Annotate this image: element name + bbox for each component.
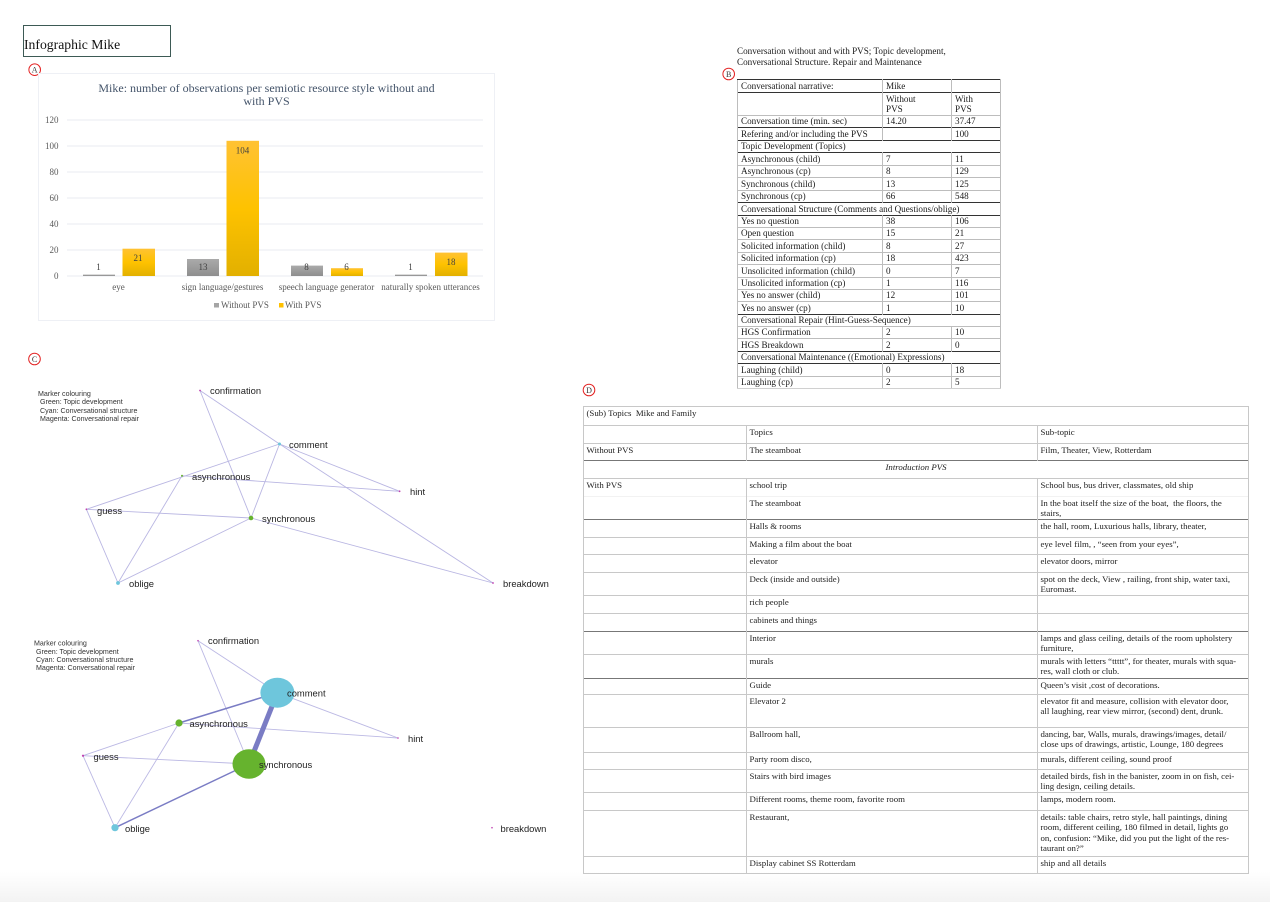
y axis labels: 80 xyxy=(50,167,59,177)
table B: conversational narrative counts: 38 xyxy=(886,216,895,226)
table B: conversational narrative counts: Yes no question xyxy=(741,216,799,226)
table D: sub topics Mike and family: School bus, bus driver, classmates, old ship xyxy=(1040,480,1193,490)
table D: sub topics Mike and family: room, different ceiling, 180 filmed in detail, lights go xyxy=(1040,822,1228,832)
node labels: confirmation xyxy=(208,635,259,646)
title xyxy=(24,26,170,56)
table B: conversational narrative counts: 66 xyxy=(886,191,895,201)
table B: conversational narrative counts: Synchronous (cp) xyxy=(741,191,806,201)
table B: conversational narrative counts: Asynchronous (child) xyxy=(741,154,820,164)
table D: sub topics Mike and family: elevator doors, mirror xyxy=(1040,556,1117,566)
badge A: A xyxy=(32,66,38,75)
table D: sub topics Mike and family: details: table chairs, retro style, hall paintings, dining xyxy=(1040,812,1227,822)
node labels xyxy=(94,635,546,834)
table B: conversational narrative counts: Conversational Maintenance ((Emotional) Expressions) xyxy=(741,352,944,362)
table B: conversational narrative counts: HGS Confirmation xyxy=(741,327,811,337)
table B: conversational narrative counts: 8 xyxy=(886,166,891,176)
table B: conversational narrative counts: 116 xyxy=(955,278,968,288)
table B: conversational narrative counts: Refering and/or including the PVS xyxy=(741,129,868,139)
y axis labels: 40 xyxy=(50,219,59,229)
y axis labels: 20 xyxy=(50,245,59,255)
node labels: comment xyxy=(287,688,326,698)
legend xyxy=(214,300,321,310)
table B: conversational narrative counts: 18 xyxy=(886,253,895,263)
table B: conversational narrative counts: 1 xyxy=(886,303,891,313)
value labels: 104 xyxy=(236,146,250,156)
table D: sub topics Mike and family: Without PVS xyxy=(586,445,633,455)
y axis labels: 60 xyxy=(50,193,59,203)
bars: with PVS xyxy=(122,141,468,276)
table D: sub topics Mike and family: lamps, modern room. xyxy=(1040,794,1116,804)
table B: conversational narrative counts: 0 xyxy=(955,340,960,350)
table D: sub topics Mike and family: Party room disco, xyxy=(750,754,812,764)
table D: sub topics Mike and family: Restaurant, xyxy=(750,812,789,822)
marker colouring legend: Magenta: Conversational repair xyxy=(36,664,136,672)
table D: sub topics Mike and family: Guide xyxy=(750,680,771,690)
table D: sub topics Mike and family: stairs, xyxy=(1040,508,1061,518)
table D: sub topics Mike and family: With PVS xyxy=(586,480,622,490)
category labels: eye xyxy=(112,282,125,292)
table D: sub topics Mike and family: Stairs with bird images xyxy=(750,771,831,781)
table B: conversational narrative counts: With xyxy=(955,94,973,104)
bars: without PVS xyxy=(83,259,427,276)
table B: conversational narrative counts: Conversational narrative: xyxy=(741,81,833,91)
table B: conversational narrative counts: Asynchronous (cp) xyxy=(741,166,811,176)
marker colouring legend: Cyan: Conversational structure xyxy=(40,407,137,415)
value labels: 6 xyxy=(344,262,349,272)
table B: conversational narrative counts: 10 xyxy=(955,327,964,337)
table B heading: Conversation without and with PVS; Topic development, xyxy=(737,46,946,56)
value labels: 1 xyxy=(408,262,413,272)
network chart: with PVS xyxy=(34,635,546,834)
badge B: B xyxy=(726,70,731,79)
table B: conversational narrative counts: 0 xyxy=(886,365,891,375)
table D: sub topics Mike and family: Making a film about the boat xyxy=(750,539,852,549)
y axis labels: 100 xyxy=(45,141,59,151)
table B: conversational narrative counts: 106 xyxy=(955,216,969,226)
table B heading xyxy=(737,46,946,67)
table B: conversational narrative counts: 548 xyxy=(955,191,969,201)
table D: sub topics Mike and family: eye level film, , “seen from your eyes”, xyxy=(1040,539,1179,549)
table D: sub topics Mike and family: Euromast. xyxy=(1040,584,1076,594)
chart title: Mike: number of observations per semiotic resource style without and xyxy=(98,81,435,95)
table B: conversational narrative counts: Yes no answer (cp) xyxy=(741,303,811,313)
table B: conversational narrative counts: 2 xyxy=(886,327,891,337)
badge C xyxy=(29,353,40,365)
table D: sub topics Mike and family: elevator fit and measure, collision with elevator door, xyxy=(1040,696,1228,706)
table B: conversational narrative counts: Conversation time (min. sec) xyxy=(741,116,847,126)
marker colouring legend: Green: Topic development xyxy=(36,648,119,656)
node labels: synchronous xyxy=(259,759,312,770)
table D: sub topics Mike and family: Film, Theater, View, Rotterdam xyxy=(1040,445,1152,455)
table B: conversational narrative counts: PVS xyxy=(955,104,972,114)
marker colouring legend: Green: Topic development xyxy=(40,398,123,406)
table D: sub topics Mike and family: all laughing, rear view mirror, (second) dent, drunk. xyxy=(1040,706,1223,716)
table B: conversational narrative counts: 27 xyxy=(955,241,964,251)
table B: conversational narrative counts: Without xyxy=(886,94,916,104)
table B: conversational narrative counts: 1 xyxy=(886,278,891,288)
table D: sub topics Mike and family: cabinets and things xyxy=(750,615,817,625)
table D: sub topics Mike and family: detailed birds, fish in the banister, zoom in on fish, cei- xyxy=(1040,771,1234,781)
table D: sub topics Mike and family: Halls & rooms xyxy=(750,521,801,531)
value labels: 18 xyxy=(446,257,456,267)
node labels: confirmation xyxy=(210,385,261,396)
table D: sub topics Mike and family: The steamboat xyxy=(750,445,801,455)
node labels: breakdown xyxy=(503,578,549,589)
badge B xyxy=(723,68,734,80)
table D: sub topics Mike and family: Ballroom hall, xyxy=(750,729,800,739)
table D: sub topics Mike and family: dancing, bar, Walls, murals, drawings/images, detail/ xyxy=(1040,729,1226,739)
legend: With PVS xyxy=(285,300,321,310)
table D: sub topics Mike and family: furniture, xyxy=(1040,643,1073,653)
table D: sub topics Mike and family: school trip xyxy=(750,480,787,490)
table D: sub topics Mike and family: close ups of drawings, artistic, Lounge, 180 degrees xyxy=(1040,739,1223,749)
node labels: guess xyxy=(97,505,122,516)
table B: conversational narrative counts: 11 xyxy=(955,154,964,164)
table B: conversational narrative counts: Unsolicited information (cp) xyxy=(741,278,845,288)
node labels: hint xyxy=(408,733,424,744)
value labels: 13 xyxy=(198,262,208,272)
table B: conversational narrative counts: 2 xyxy=(886,340,891,350)
node labels: hint xyxy=(410,486,426,497)
node labels: asynchronous xyxy=(192,471,251,482)
panel: bar chart of semiotic resource styles xyxy=(38,74,494,320)
badge A xyxy=(29,64,40,76)
badge D xyxy=(583,384,595,396)
table B: conversational narrative counts: 0 xyxy=(886,266,891,276)
table D: sub topics Mike and family: murals, different ceiling, sound proof xyxy=(1040,754,1172,764)
marker colouring legend: Cyan: Conversational structure xyxy=(36,656,133,664)
table D: sub topics Mike and family: murals with letters “ttttt”, for theater, murals with squa- xyxy=(1040,656,1236,666)
table B: conversational narrative counts: Yes no answer (child) xyxy=(741,290,820,300)
legend: Without PVS xyxy=(221,300,269,310)
table B heading: Conversational Structure. Repair and Maintenance xyxy=(737,57,922,67)
table D: sub topics Mike and family: In the boat itself the size of the boat, the floors, the xyxy=(1040,498,1222,508)
table D: sub topics Mike and family: taurant on?” xyxy=(1040,843,1084,853)
table D: sub topics Mike and family: (Sub) Topics Mike and Family xyxy=(586,408,696,418)
table B: conversational narrative counts: 21 xyxy=(955,228,964,238)
table B: conversational narrative counts: Solicited information (cp) xyxy=(741,253,836,263)
y axis labels: 120 xyxy=(45,115,59,125)
table B: conversational narrative counts: HGS Breakdown xyxy=(741,340,804,350)
table B: conversational narrative counts: Open question xyxy=(741,228,794,238)
y axis labels: 0 xyxy=(54,271,59,281)
table D: sub topics Mike and family xyxy=(583,406,1249,874)
marker colouring legend: Marker colouring xyxy=(38,390,91,398)
table B: conversational narrative counts: 15 xyxy=(886,228,895,238)
table B: conversational narrative counts: Topic Development (Topics) xyxy=(741,141,846,151)
table D: sub topics Mike and family: ling design, ceiling details. xyxy=(1040,781,1135,791)
table B: conversational narrative counts: 7 xyxy=(955,266,960,276)
table D: sub topics Mike and family: elevator xyxy=(750,556,778,566)
category labels: speech language generator xyxy=(279,282,374,292)
table B: conversational narrative counts: 129 xyxy=(955,166,969,176)
chart title: with PVS xyxy=(243,94,290,108)
table B: conversational narrative counts: 100 xyxy=(955,129,969,139)
table D: sub topics Mike and family: murals xyxy=(750,656,773,666)
value labels: 8 xyxy=(304,262,309,272)
table B: conversational narrative counts: Mike xyxy=(886,81,905,91)
category labels: naturally spoken utterances xyxy=(381,282,480,292)
table D: sub topics Mike and family: Deck (inside and outside) xyxy=(750,574,840,584)
table D: sub topics Mike and family: lamps and glass ceiling, details of the room upholstery xyxy=(1040,633,1232,643)
title: Infographic Mike xyxy=(24,37,120,52)
table B: conversational narrative counts: Solicited information (child) xyxy=(741,241,845,251)
table D: sub topics Mike and family: Interior xyxy=(750,633,776,643)
table D: sub topics Mike and family: Topics xyxy=(750,427,773,437)
table B: conversational narrative counts: 10 xyxy=(955,303,964,313)
table B: conversational narrative counts: 7 xyxy=(886,154,891,164)
table D: sub topics Mike and family: The steamboat xyxy=(750,498,801,508)
table B: conversational narrative counts xyxy=(737,79,1001,389)
category labels: sign language/gestures xyxy=(182,282,264,292)
table B: conversational narrative counts: Synchronous (child) xyxy=(741,179,815,189)
marker colouring legend xyxy=(38,390,140,423)
table D: sub topics Mike and family: rich people xyxy=(750,597,789,607)
table D: sub topics Mike and family: Elevator 2 xyxy=(750,696,786,706)
table B: conversational narrative counts: 37.47 xyxy=(955,116,976,126)
table D: sub topics Mike and family: Queen’s visit ,cost of decorations. xyxy=(1040,680,1160,690)
table D: sub topics Mike and family: Display cabinet SS Rotterdam xyxy=(750,858,856,868)
node labels: oblige xyxy=(129,578,154,589)
table B: conversational narrative counts: 423 xyxy=(955,253,969,263)
badge C: C xyxy=(32,355,37,364)
node labels xyxy=(97,385,549,589)
node labels: guess xyxy=(94,751,119,762)
node labels: asynchronous xyxy=(190,718,248,729)
badge D: D xyxy=(586,386,592,395)
marker colouring legend xyxy=(34,640,136,672)
table B: conversational narrative counts: PVS xyxy=(886,104,903,114)
table B: conversational narrative counts: 125 xyxy=(955,179,969,189)
table D: sub topics Mike and family: res, wall cloth or club. xyxy=(1040,666,1119,676)
table B: conversational narrative counts: Conversational Structure (Comments and Questions/oblige) xyxy=(741,204,959,214)
table B: conversational narrative counts: Unsolicited information (child) xyxy=(741,266,855,276)
node labels: breakdown xyxy=(500,823,546,834)
node labels: synchronous xyxy=(262,513,315,524)
table D: sub topics Mike and family: on, confusion: “Mike, did you put the light of the res- xyxy=(1040,833,1229,843)
table D: sub topics Mike and family: Sub-topic xyxy=(1040,427,1075,437)
marker colouring legend: Marker colouring xyxy=(34,640,87,648)
table B: conversational narrative counts: 2 xyxy=(886,377,891,387)
table D: sub topics Mike and family: Introduction PVS xyxy=(886,462,946,472)
table B: conversational narrative counts: 14.20 xyxy=(886,116,907,126)
value labels xyxy=(96,146,456,272)
node labels: comment xyxy=(289,439,328,450)
value labels: 21 xyxy=(134,253,142,263)
table B: conversational narrative counts: 8 xyxy=(886,241,891,251)
table B: conversational narrative counts: 101 xyxy=(955,290,969,300)
table B: conversational narrative counts: Laughing (child) xyxy=(741,365,803,375)
table B: conversational narrative counts: Conversational Repair (Hint-Guess-Sequence) xyxy=(741,315,911,325)
table B: conversational narrative counts: Laughing (cp) xyxy=(741,377,793,387)
chart title xyxy=(98,81,435,108)
node labels: oblige xyxy=(125,823,150,834)
marker colouring legend: Magenta: Conversational repair xyxy=(40,415,140,423)
table D: sub topics Mike and family: ship and all details xyxy=(1040,858,1106,868)
table B: conversational narrative counts: 12 xyxy=(886,290,895,300)
y axis labels xyxy=(45,115,59,281)
category labels xyxy=(112,282,480,292)
table B: conversational narrative counts: 18 xyxy=(955,365,964,375)
table D: sub topics Mike and family: spot on the deck, View , railing, front ship, water taxi, xyxy=(1040,574,1230,584)
value labels: 1 xyxy=(96,262,101,272)
table D: sub topics Mike and family: Different rooms, theme room, favorite room xyxy=(750,794,905,804)
table D: sub topics Mike and family: the hall, room, Luxurious halls, library, theater, xyxy=(1040,521,1206,531)
network chart: without PVS xyxy=(38,385,549,589)
table B: conversational narrative counts: 13 xyxy=(886,179,895,189)
table B: conversational narrative counts: 5 xyxy=(955,377,960,387)
